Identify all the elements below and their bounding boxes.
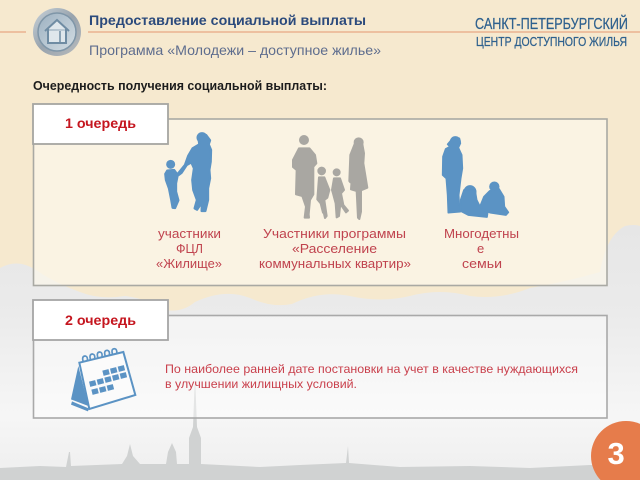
tab: second queue: 2 очередь [65,312,136,328]
heading: programme: Программа «Молодежи – доступное жилье» [89,42,381,58]
panel: first queue [33,104,607,286]
section heading: Очередность получения социальной выплаты: [33,79,327,93]
tab: first queue: 1 очередь [65,115,136,131]
label: resettlement programme: «Расселение [292,241,377,256]
label: FCP participants: участники [158,226,221,241]
label: FCP participants: «Жилище» [156,256,222,271]
label: large families [444,226,519,271]
icon: mother and child [165,133,211,211]
tab: first queue [33,104,168,144]
heading: title: Предоставление социальной выплаты [89,12,366,28]
label: large families: Многодетны [444,226,519,241]
page number badge: 3 [608,436,625,471]
icon: family [293,136,367,219]
label: large families: е [477,241,484,256]
logo emblem [33,8,81,56]
text: second queue description: По наиболее ранней дате постановки на учет в качестве нуждающихся [165,362,578,376]
panel: second queue [33,300,607,418]
label: large families: семьи [462,256,502,271]
skyline [0,385,640,480]
label: resettlement programme: коммунальных квартир» [259,256,411,271]
tab: second queue [33,300,168,340]
header rule [0,31,640,33]
icon: large family [443,137,508,217]
page number badge [591,421,640,480]
text: second queue description: в улучшении жилищных условий. [165,377,357,391]
organisation name [475,15,628,49]
label: FCP participants [156,226,222,271]
label: resettlement programme [259,226,411,271]
icon: calendar [71,349,135,411]
label: resettlement programme: Участники программы [263,226,406,241]
text: second queue description [165,362,578,391]
label: FCP participants: ФЦЛ [176,241,203,256]
